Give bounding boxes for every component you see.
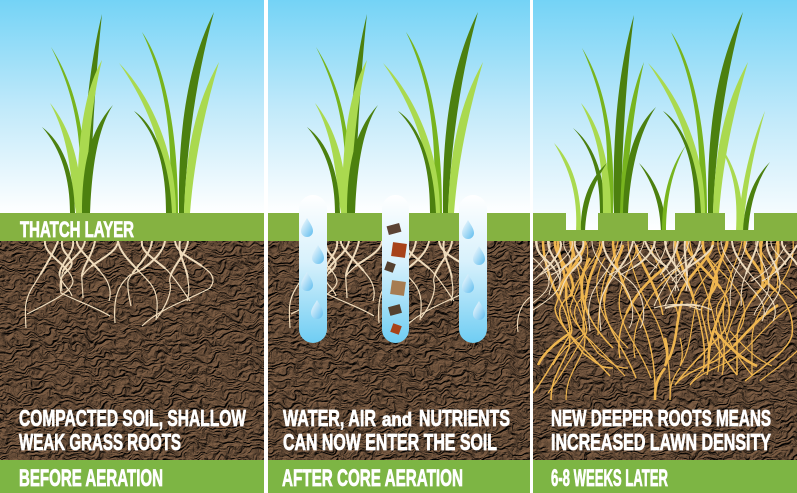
caption: before aeration: WEAK GRASS ROOTS xyxy=(19,429,181,455)
tall grass tufts xyxy=(573,12,748,213)
new small grass shoots xyxy=(554,111,770,232)
sky background xyxy=(268,0,530,214)
soil nutrient particles xyxy=(384,223,407,335)
roots xyxy=(289,241,530,332)
panel: after core aeration xyxy=(268,0,530,493)
golden new roots xyxy=(533,241,797,400)
label: thatch layer: THATCH LAYER xyxy=(20,217,134,242)
sky background xyxy=(0,0,264,214)
aeration hole: water left xyxy=(299,195,327,343)
thatch layer band with core holes xyxy=(533,213,797,241)
caption: after aeration xyxy=(283,405,510,455)
panel: 6-8 weeks later xyxy=(522,0,797,493)
deep roots xyxy=(522,241,797,400)
soil xyxy=(0,241,264,461)
grass tufts xyxy=(42,12,219,213)
thatch layer band xyxy=(0,213,264,241)
aeration hole: nutrients centre xyxy=(382,195,409,343)
caption: before aeration: COMPACTED SOIL, SHALLOW xyxy=(19,405,246,431)
footer band: before aeration: BEFORE AERATION xyxy=(19,465,163,492)
footer band: 6-8 weeks later: 6-8 WEEKS LATER xyxy=(551,465,668,492)
aeration hole: water right xyxy=(459,195,487,343)
sky background xyxy=(533,0,797,232)
soil xyxy=(268,241,530,461)
footer band: after core aeration: AFTER CORE AERATION xyxy=(282,465,463,492)
water drops xyxy=(301,218,324,319)
caption: after aeration: WATER, AIR xyxy=(283,405,376,431)
thatch layer band xyxy=(268,213,530,241)
soil xyxy=(533,241,797,461)
footer band: after core aeration xyxy=(268,460,530,493)
caption: after aeration: CAN NOW ENTER THE SOIL xyxy=(283,429,497,455)
grass tufts xyxy=(307,12,483,213)
footer band: 6-8 weeks later xyxy=(533,460,797,493)
caption: before aeration xyxy=(19,405,246,455)
cream older roots xyxy=(522,241,797,331)
shallow roots xyxy=(25,241,213,328)
caption: after aeration: and xyxy=(382,410,412,431)
panel: before aeration xyxy=(0,0,264,493)
water drops xyxy=(462,220,485,320)
caption: after aeration: NUTRIENTS xyxy=(419,405,510,431)
caption: 6-8 weeks later xyxy=(551,405,771,455)
